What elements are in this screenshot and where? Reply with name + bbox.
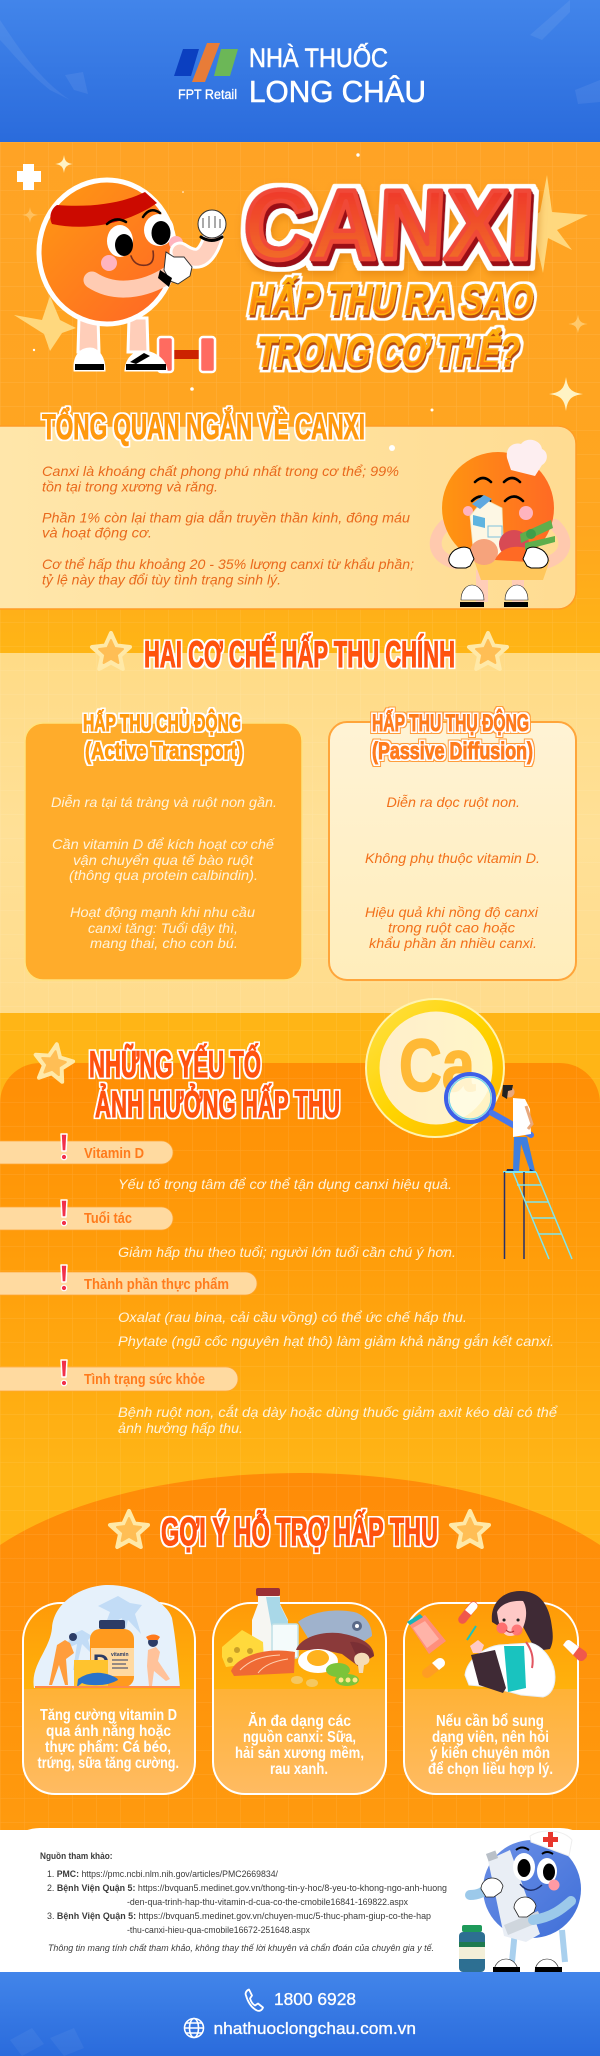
- logo: FPT Retail mark: FPT Retail: [178, 87, 237, 102]
- passive diffusion text: khẩu phần ăn nhiều canxi.: [369, 935, 537, 951]
- active transport text: vận chuyển qua tế bào ruột: [73, 852, 254, 868]
- illustration: sun, vitamin D bottle, fish: [33, 1585, 180, 1688]
- overview text: [42, 463, 414, 588]
- card text: trứng, sữa tăng cường.: [38, 1755, 179, 1772]
- card text: Tăng cường vitamin D: [40, 1707, 177, 1724]
- mascot: calcium with milk and vegetables: [389, 440, 564, 607]
- heading text: ẢNH HƯỞNG HẤP THU: [95, 1083, 340, 1125]
- card: supplement tip: [404, 1591, 587, 1794]
- heading text: [89, 1043, 340, 1125]
- active transport heading: [83, 708, 243, 765]
- card text: qua ánh nắng hoặc: [46, 1722, 171, 1740]
- panel: passive diffusion: [329, 709, 576, 980]
- star: [32, 1041, 76, 1083]
- panel: references: [0, 1828, 600, 1972]
- factor: vitamin D: [0, 1134, 452, 1192]
- alert icon: [61, 1200, 67, 1226]
- card text: Ăn đa dạng các: [248, 1713, 351, 1730]
- references heading: Nguồn tham khảo:: [40, 1851, 112, 1862]
- factor: health status: [0, 1360, 558, 1436]
- footer band: [0, 1972, 600, 2056]
- phone number: 1800 6928: [274, 1989, 356, 2009]
- active transport heading: HẤP THU CHỦ ĐỘNG: [83, 708, 241, 737]
- illustration: calcium-rich foods: [222, 1588, 374, 1687]
- panel: active transport: [25, 708, 302, 980]
- logo wordmark: NHÀ THUỐC: [249, 41, 388, 73]
- active transport text: Hoạt động mạnh khi nhu cầu: [70, 904, 255, 920]
- heading: two mechanisms: [92, 633, 507, 675]
- active transport text: Diễn ra tại tá tràng và ruột non gần.: [51, 794, 277, 810]
- overview heading: TỔNG QUAN NGẮN VỀ CANXI: [42, 407, 365, 447]
- hero sparkles and bursts: [14, 153, 588, 412]
- overview text: Cơ thể hấp thu khoảng 20 - 35% lượng canxi từ khẩu phần;: [42, 556, 414, 572]
- factors background: [0, 1013, 600, 1828]
- chef hat: [507, 440, 547, 476]
- factor text: [118, 1309, 554, 1349]
- factors orange panel: [0, 1063, 600, 1470]
- factor: age: [0, 1200, 456, 1260]
- dumbbell: [158, 337, 215, 372]
- card text: ý kiến chuyên môn: [430, 1745, 550, 1762]
- heading: tips: [110, 1509, 489, 1554]
- card text: [428, 1713, 553, 1778]
- factor text: Bệnh ruột non, cắt dạ dày hoặc dùng thuốc giảm axit kéo dài có thể: [118, 1404, 558, 1420]
- panel: overview: [0, 407, 576, 609]
- active transport heading: (Active Transport): [85, 738, 243, 765]
- mascot: orange calcium with dumbbell: [39, 180, 226, 372]
- references list: 1. PMC: https://pmc.ncbi.nlm.nih.gov/articles/PMC2669834/: [47, 1869, 278, 1880]
- card text: dạng viên, nên hỏi: [432, 1729, 549, 1746]
- star left: [110, 1511, 148, 1547]
- factor label: Vitamin D: [84, 1146, 144, 1162]
- active transport text: canxi tăng: Tuổi dậy thì,: [88, 920, 238, 936]
- overview text: Canxi là khoáng chất phong phú nhất trong cơ thể; 99%: [42, 463, 399, 479]
- active transport text: mang thai, cho con bú.: [90, 935, 238, 951]
- mascot face: [101, 210, 183, 271]
- card text: hải sản xương mềm,: [235, 1745, 364, 1762]
- illustration: doctor with clipboard and pills: [407, 1591, 587, 1697]
- alert icon: [61, 1265, 67, 1291]
- references list: 3. Bệnh Viện Quận 5: https://bvquan5.medinet.gov.vn/chuyen-muc/5-thuc-pham-giup-co-the-hap: [47, 1911, 431, 1922]
- illustration: sun, vitamin D bottle, fish: vitamin: [111, 1652, 129, 1658]
- overview text: Phần 1% còn lại tham gia dẫn truyền thần kinh, đông máu: [42, 510, 410, 526]
- overview text: tỷ lệ này thay đổi tùy tình trạng sinh lý.: [42, 572, 281, 588]
- active transport text: [51, 794, 277, 951]
- header band: [0, 0, 600, 142]
- mascot legs: [78, 318, 148, 352]
- globe icon: [184, 2018, 204, 2038]
- factor: food components: [0, 1265, 554, 1349]
- milk carton: [470, 499, 504, 560]
- mascot: blue nurse: [459, 1831, 581, 1972]
- headband: [50, 192, 157, 227]
- coin label: Ca: [399, 1024, 476, 1107]
- overview text: tồn tại trong xương và răng.: [42, 478, 218, 494]
- passive diffusion heading: [372, 709, 533, 765]
- passive diffusion text: Hiệu quả khi nồng độ canxi: [365, 904, 539, 920]
- logo: FPT Retail mark: [174, 43, 238, 102]
- overview text: và hoạt động cơ.: [42, 524, 152, 540]
- mascot body: [39, 180, 175, 324]
- big bottle: [488, 1850, 540, 1942]
- person on ladder: [502, 1085, 536, 1173]
- mascot shoes: [75, 349, 166, 370]
- passive diffusion text: [365, 794, 540, 951]
- star right: [451, 1511, 489, 1547]
- supplement jar: [459, 1925, 485, 1972]
- ladder: [503, 1172, 572, 1259]
- chef gloves: [449, 547, 474, 568]
- factor text: Phytate (ngũ cốc nguyên hạt thô) làm giảm khả năng gắn kết canxi.: [118, 1333, 554, 1349]
- tips orange dome: [0, 1473, 600, 1830]
- references list: 2. Bệnh Viện Quận 5: https://bvquan5.medinet.gov.vn/thong-tin-y-hoc/8-yeu-to-khong-ngo-anh-huong: [47, 1883, 447, 1894]
- logo wordmark: LONG CHÂU: [249, 74, 426, 109]
- passive diffusion text: Diễn ra dọc ruột non.: [386, 794, 520, 810]
- nurse arms: [470, 1888, 571, 1920]
- star left: [92, 633, 130, 669]
- magnifier: [446, 1074, 531, 1135]
- illustration: sun, vitamin D bottle, fish: D: [93, 1650, 109, 1675]
- factor label: Tình trạng sức khỏe: [84, 1372, 205, 1388]
- alert icon: [61, 1360, 67, 1386]
- hero background: [0, 142, 600, 653]
- passive diffusion heading: (Passive Diffusion): [372, 738, 533, 765]
- factor text: Giảm hấp thu theo tuổi; người lớn tuổi cần chú ý hơn.: [118, 1244, 456, 1260]
- factor text: Yếu tố trọng tâm để cơ thể tận dụng canxi hiệu quả.: [118, 1176, 452, 1192]
- passive diffusion text: Không phụ thuộc vitamin D.: [365, 850, 540, 866]
- title word CANXI: CANXI: [241, 169, 537, 280]
- factor text: Oxalat (rau bina, cải cầu vồng) có thể ức chế hấp thu.: [118, 1309, 467, 1325]
- logo wordmark: [249, 41, 426, 109]
- card text: thực phẩm: Cá béo,: [45, 1739, 171, 1756]
- disclaimer: Thông tin mang tính chất tham khảo, không thay thế lời khuyên và chẩn đoán của chuyên gia y tế.: [48, 1943, 434, 1954]
- nurse cap: [530, 1831, 572, 1856]
- references list: [47, 1869, 447, 1936]
- heading text: NHỮNG YẾU TỐ: [89, 1043, 261, 1085]
- mascot arms and gloves: [92, 210, 226, 289]
- phone icon: [246, 1990, 263, 2011]
- happy eyes: [472, 478, 523, 501]
- illustration: calcium coin and magnifier: [366, 999, 572, 1259]
- card: vitamin D tip: [23, 1585, 195, 1794]
- passive diffusion text: trong ruột cao hoặc: [388, 920, 515, 936]
- active transport text: (thông qua protein calbindin).: [69, 867, 258, 883]
- card text: để chọn liều hợp lý.: [428, 1761, 553, 1778]
- website: nhathuoclongchau.com.vn: [214, 2019, 416, 2038]
- card: food sources tip: [213, 1588, 386, 1794]
- factor label: Thành phần thực phẩm: [84, 1277, 229, 1293]
- coin: [366, 999, 504, 1137]
- mechanisms background: [0, 653, 600, 1013]
- card text: Nếu cần bổ sung: [436, 1713, 544, 1730]
- hero title: [241, 169, 538, 375]
- card text: [235, 1713, 364, 1778]
- references list: -den-qua-trinh-hap-thu-vitamin-d-cua-co-the-cmobile16841-169822.aspx: [127, 1897, 408, 1908]
- card text: [38, 1707, 179, 1772]
- factor text: ảnh hưởng hấp thu.: [118, 1420, 243, 1436]
- produce basket: [474, 560, 550, 580]
- factor text: [118, 1404, 558, 1436]
- card text: rau xanh.: [270, 1761, 328, 1778]
- references list: -thu-canxi-hieu-qua-cmobile16672-251648.aspx: [127, 1925, 310, 1936]
- alert icon: [61, 1134, 67, 1160]
- nurse face: [513, 1853, 535, 1881]
- star right: [469, 633, 507, 669]
- card text: nguồn canxi: Sữa,: [243, 1729, 356, 1746]
- heading: factors: [32, 1041, 340, 1125]
- factor label: Tuổi tác: [84, 1211, 132, 1227]
- active transport text: Cần vitamin D để kích hoạt cơ chế: [52, 836, 275, 852]
